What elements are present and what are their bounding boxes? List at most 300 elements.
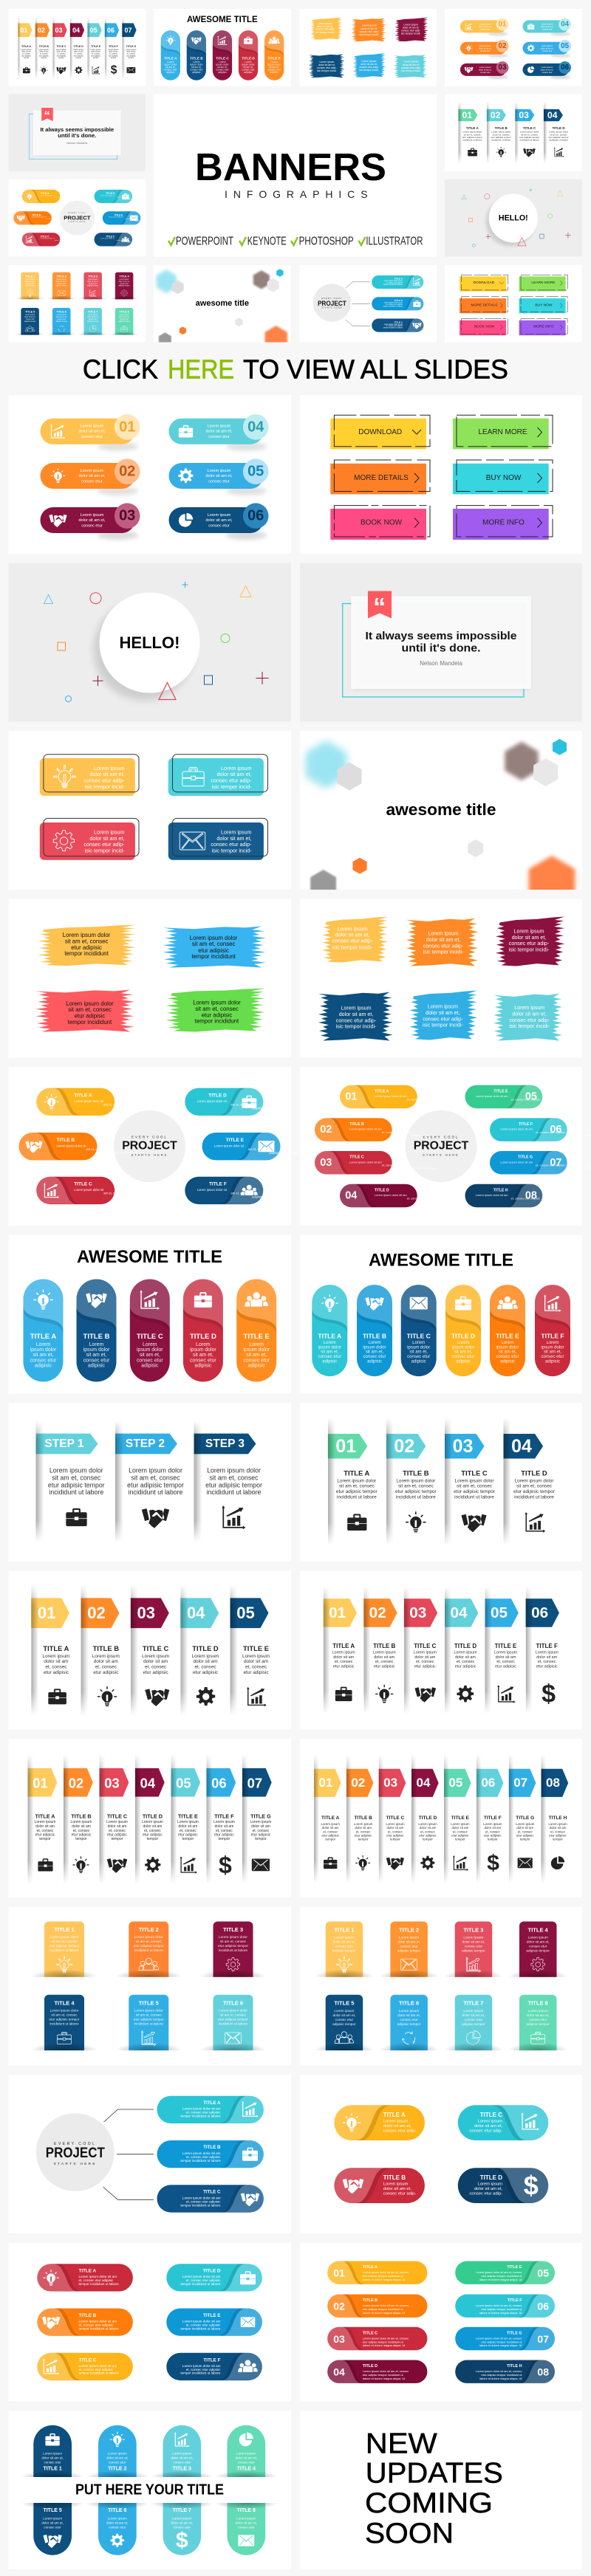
step 05: TITLE E (178, 1813, 198, 1819)
pill: title C: consec etur adip- (470, 2129, 502, 2133)
pill 07: Lorem ipsum dolor sit am et, consec (476, 2336, 522, 2340)
step 01: TITLE A (344, 1469, 370, 1477)
pill: title B: tempor incididunt ut labore (78, 2326, 119, 2330)
pill 03: dolor sit am et, (78, 518, 106, 523)
pill 05 (455, 2261, 555, 2284)
step 05: TITLE E (495, 1643, 517, 1649)
card: briefcase: consec etur adip- (211, 777, 252, 783)
step 05: 05 (176, 1775, 191, 1790)
step 02: 02 (369, 1604, 386, 1621)
pill: title C (458, 2105, 548, 2140)
panel: four step columns (300, 1403, 582, 1562)
pill 01 (340, 1085, 462, 1108)
blurred hexagons (305, 739, 575, 909)
pill 01: labore et dolore magna aliqua. Ut (363, 2277, 406, 2281)
pill 04: Lorem ipsum dolor sit am et, consec (363, 2369, 409, 2373)
capsule: title C (401, 1285, 437, 1376)
pill 07 (490, 1151, 591, 1174)
step 3: STEP 3 (205, 1438, 245, 1450)
pill: title C: TITLE C (480, 2112, 502, 2118)
pill 02: 02 (333, 2301, 345, 2312)
panel: numbered pills with icons (9, 395, 291, 554)
brush: blue (163, 926, 266, 967)
pill: title C: Lorem ipsum dolor sit am (78, 2363, 117, 2367)
brush: yellow: Lorem ipsum (337, 926, 368, 932)
pill: title B: Lorem ipsum (383, 2182, 408, 2187)
decorative shapes (44, 582, 269, 701)
button: more details (330, 460, 430, 494)
pill: title B: TITLE B (203, 2145, 221, 2150)
step 03 (404, 1586, 437, 1714)
step 06: $ (219, 1852, 232, 1878)
pill: title D: tempor incididunt ut labore (180, 2281, 221, 2285)
step 03: TITLE C (386, 1816, 404, 1821)
brush: blue: Lorem ipsum dolor (190, 935, 238, 941)
project circle: PROJECT (414, 1140, 468, 1152)
card: gear: dolor sit am et, (89, 834, 124, 842)
pill: title A (37, 2264, 133, 2292)
panel: project with three connected pills (9, 2075, 291, 2233)
step 03: TITLE C (143, 1644, 169, 1652)
pill: title A: TITLE A (78, 2269, 97, 2274)
brush: teal: consec etur adip- (509, 1017, 550, 1023)
pill 01: Lorem ipsum dolor sit am et, consec (363, 2270, 409, 2274)
card: title 5: TITLE 5 (139, 1999, 159, 2006)
card: envelope: Lorem ipsum (221, 828, 252, 835)
pill 07: TITLE G (518, 1155, 533, 1160)
brush: blue: isic tempor incidi- (423, 1022, 463, 1028)
thumbnail: project six pills (9, 179, 150, 256)
tab: title 1: consec etur (44, 2460, 61, 2464)
brush: orange: dolor sit am et, (426, 937, 460, 943)
card: title 4 (31, 1995, 98, 2050)
pill 05 (168, 458, 269, 495)
brush: yellow: sit am et, consec (65, 938, 108, 944)
pill 08: Lorem ipsum dolor sit am et, consec (476, 2369, 522, 2373)
pill 02: consec etur (81, 479, 103, 484)
step 06: 06 (531, 1604, 548, 1621)
step 1 (35, 1421, 105, 1542)
pill 08 (465, 1184, 570, 1207)
brush: maroon: Lorem ipsum (513, 928, 544, 934)
pill: title F: Lorem ipsum dolor sit am (182, 2363, 221, 2367)
pill 05: etur adipisc tempor incididunt ut (482, 2274, 522, 2278)
step 02: TITLE B (373, 1643, 396, 1649)
panel: four brush banners (9, 899, 291, 1057)
step 06 (206, 1754, 236, 1883)
software list with check marks: KEYNOTE (247, 235, 287, 248)
pill: title B: consec etur adip- (383, 2192, 416, 2197)
pill: title E: TITLE E (203, 2313, 220, 2318)
pill: title C (157, 2185, 264, 2213)
tab: title 3: Lorem ipsum (172, 2451, 192, 2455)
brush: maroon: dolor sit am et, (512, 935, 546, 941)
pill 02: dolor sit am et, (78, 474, 106, 478)
tab: title 1: Lorem ipsum (43, 2451, 62, 2455)
step 06: 06 (481, 1776, 495, 1790)
card: bulb (40, 755, 139, 796)
pill: title C: Lorem ipsum (477, 2120, 502, 2124)
step 07: TITLE G (250, 1813, 271, 1819)
pill: title A: consec etur adip- (383, 2129, 416, 2133)
step 03 (131, 1584, 169, 1716)
step 06: TITLE F (484, 1816, 502, 1821)
pill 05: dolor sit am et, (205, 474, 233, 478)
step 3 (194, 1421, 262, 1542)
pill 05: TITLE E (507, 2265, 522, 2270)
pill 02: 02 (320, 1124, 332, 1136)
brush: blue (409, 991, 477, 1040)
card: title 6: TITLE 6 (399, 2000, 419, 2007)
call to action: click here to view all slides (83, 354, 508, 384)
capsule: title D: TITLE D (190, 1333, 216, 1341)
step 01: 01 (38, 1604, 55, 1622)
step 03: TITLE C (414, 1643, 437, 1649)
step 06 (476, 1754, 504, 1883)
pill 02: 02 (119, 464, 135, 480)
pill 03 (40, 503, 140, 540)
pill 08: 08 (537, 2366, 549, 2377)
pill 03: 03 (333, 2333, 345, 2345)
capsule: title B: TITLE B (363, 1332, 386, 1339)
capsule: title B (357, 1285, 392, 1376)
project circle: STARTS HERE (54, 2162, 97, 2165)
brush: green: sit am et, consec (195, 1005, 239, 1011)
pill: title D: et, consec etur adipisic (186, 2278, 221, 2281)
pill: title C (37, 2353, 133, 2380)
step 04: 04 (417, 1776, 431, 1790)
quote text: until it's done. (402, 642, 480, 654)
panel: six brush banners (300, 899, 582, 1057)
card: title 7: TITLE 7 (463, 2000, 483, 2007)
tab: title 7: $ (176, 2528, 188, 2553)
project circle: STARTS HERE (423, 1153, 460, 1156)
thumbnail: quote slide (9, 95, 146, 171)
pill: title B (334, 2168, 425, 2203)
step 07: 07 (513, 1776, 527, 1790)
pill 06: 06 (537, 2301, 549, 2312)
panel: eight title cards (300, 1906, 582, 2066)
capsule: title E: TITLE E (496, 1332, 519, 1339)
step 06: 06 (211, 1775, 227, 1790)
card: envelope: consec etur adip- (211, 840, 252, 848)
tab: title 1: TITLE 1 (43, 2466, 62, 2472)
brush: green (165, 988, 264, 1032)
pill: title D: $ (524, 2171, 539, 2201)
button: buy now (453, 460, 553, 494)
heading: new updates coming soon: COMING (365, 2487, 493, 2519)
card: briefcase: dolor sit am et, (216, 771, 251, 777)
pill 05: Lorem ipsum (208, 469, 231, 473)
tab: title 7: dolor sit am et, (171, 2521, 193, 2524)
pill 02 (327, 2295, 427, 2318)
tab: title 5: consec etur (44, 2525, 61, 2529)
pill: title C: TITLE C (203, 2190, 221, 2195)
step 03: 03 (383, 1776, 397, 1790)
card: title 4 (508, 1921, 567, 1977)
pill 03: Lorem ipsum dolor sit am et, consec (363, 2336, 409, 2340)
pill: title C: dolor sit am et, (474, 2124, 502, 2129)
software list with check marks (168, 235, 423, 248)
pill 06: etur adipisc tempor incididunt ut (482, 2307, 522, 2311)
tab: title 5: Lorem ipsum (43, 2516, 62, 2520)
pill: title D: Lorem ipsum dolor sit am (182, 2275, 221, 2278)
step 01: 01 (329, 1604, 346, 1621)
step 04 (504, 1418, 556, 1545)
step 05: 05 (236, 1604, 255, 1622)
step 05 (230, 1584, 270, 1716)
pill 08: labore et dolore magna aliqua. Ut (479, 2376, 522, 2380)
capsule: title D: TITLE D (451, 1332, 475, 1339)
pill: title E (166, 2308, 262, 2336)
tab: title 7: TITLE 7 (173, 2508, 191, 2513)
brush: maroon (496, 917, 564, 966)
button: more details: MORE DETAILS (354, 474, 409, 482)
pill 08: TITLE H (493, 1188, 508, 1192)
step 05: 05 (448, 1776, 462, 1790)
pill 04: etur adipisc tempor incididunt ut (363, 2373, 404, 2377)
pill 02: etur adipisc tempor incididunt ut (363, 2307, 404, 2311)
pill 06 (168, 503, 269, 540)
panel: project with eight numbered pills (300, 1067, 591, 1226)
step 01 (314, 1754, 341, 1883)
step 04: TITLE D (521, 1469, 547, 1477)
tab: title 3 (151, 2425, 213, 2477)
brush: blue: Lorem ipsum (428, 1004, 458, 1010)
step 08: TITLE H (549, 1816, 567, 1821)
tab: title 8: Lorem ipsum (236, 2516, 256, 2520)
brush: yellow: Lorem ipsum dolor (63, 932, 111, 938)
card: title 2 (115, 1921, 182, 1977)
tab: title 7 (151, 2503, 213, 2555)
thumbnail: seven step columns (9, 9, 146, 86)
card: envelope: dolor sit am et, (216, 834, 251, 842)
heading: new updates coming soon (365, 2428, 503, 2549)
hello circle (93, 592, 199, 700)
pill: title D: TITLE D (480, 2174, 502, 2181)
heading: awesome title: AWESOME TITLE (77, 1247, 222, 1267)
button: download: DOWNLOAD (358, 428, 402, 436)
pill 01: dolor sit am et, (78, 430, 106, 434)
project circle: EVERY COOL (54, 2142, 96, 2146)
pill: title A: TITLE A (74, 1093, 92, 1098)
pill: title B: et, consec etur adipisic (78, 2323, 114, 2326)
pill 01: etur adipisc tempor incididunt ut (363, 2274, 404, 2278)
brush: blue: dolor sit am et, (426, 1010, 460, 1016)
step 2: STEP 2 (126, 1438, 165, 1450)
card: title 6 (199, 1995, 266, 2050)
step 01 (28, 1754, 57, 1883)
card: briefcase: isic tempor incid- (212, 783, 252, 790)
step 02: TITLE B (71, 1813, 92, 1819)
pill: title D: dolor sit am et, (474, 2187, 502, 2191)
tab: title 2: Lorem ipsum (108, 2451, 127, 2455)
pill: title D (166, 2264, 262, 2292)
pill 05: 05 (525, 1090, 537, 1102)
card: title 4: TITLE 4 (54, 1999, 75, 2006)
capsule: title A: TITLE A (30, 1333, 56, 1341)
capsule: title B: TITLE B (83, 1333, 110, 1341)
card: title 5: TITLE 5 (334, 2000, 354, 2007)
pill 02: TITLE B (363, 2298, 378, 2303)
panel: eight arch tabs with central title (9, 2411, 291, 2569)
brush: blue: tempor incididunt (191, 953, 236, 960)
step 05 (171, 1754, 200, 1883)
step 03: 03 (453, 1436, 473, 1457)
pill 01: 01 (345, 1090, 357, 1102)
panel: quote slide (300, 563, 582, 722)
step 02 (363, 1586, 397, 1714)
step 04: TITLE D (192, 1644, 219, 1652)
panel: five capsules with title (9, 1234, 291, 1394)
pill 07 (455, 2327, 555, 2350)
step 06: $ (487, 1851, 499, 1875)
thumbnail: dashed buttons (445, 265, 582, 342)
brush: green: tempor incididunt (195, 1017, 239, 1024)
pill: title A: et, consec etur adipisic (78, 2278, 114, 2281)
pill 04: TITLE D (363, 2364, 378, 2369)
heading: new updates coming soon: SOON (365, 2518, 454, 2549)
tab: title 8: dolor sit am et, (236, 2521, 257, 2524)
pill: title D (185, 1088, 282, 1116)
pill: title A (36, 1088, 160, 1116)
tab: title 2 (86, 2425, 149, 2477)
capsule: title A (24, 1279, 64, 1382)
brush: orange: consec etur adip- (423, 943, 464, 949)
tab: title 4: consec etur (238, 2460, 255, 2464)
pill: title B: et, consec etur adipisic (186, 2154, 221, 2159)
pill 03: consec etur (81, 523, 103, 528)
pill: title A (157, 2096, 264, 2123)
heading: put here your title: PUT HERE YOUR TITLE (75, 2482, 224, 2498)
pill: title D: Lorem ipsum (477, 2182, 502, 2187)
pill: title B (157, 2140, 264, 2168)
tab: title 3: TITLE 3 (173, 2466, 191, 2472)
card: title 6 (379, 1995, 439, 2050)
capsule: title D (445, 1285, 481, 1376)
pill 01 (327, 2261, 427, 2284)
tab: title 7: consec etur (174, 2525, 191, 2529)
pill 04: 04 (247, 419, 264, 435)
card: title 1 (31, 1921, 98, 1977)
pill 05 (465, 1085, 570, 1108)
card: title 3: TITLE 3 (223, 1926, 243, 1933)
pill 02: Lorem ipsum dolor sit am et, consec (363, 2304, 409, 2307)
card: title 3 (199, 1921, 266, 1977)
brush: maroon: isic tempor incidi- (509, 947, 550, 952)
brush: orange: Lorem ipsum (428, 930, 459, 936)
thumbnail: six brush banners (300, 9, 437, 86)
card: title 8 (508, 1995, 567, 2050)
quote card (351, 597, 531, 689)
brush: orange (406, 918, 478, 966)
button: book now: BOOK NOW (361, 518, 403, 527)
brush: yellow: isic tempor incidi- (332, 945, 373, 951)
step 01: TITLE A (43, 1644, 69, 1652)
quote author: Nelson Mandela (420, 660, 462, 667)
card: title 2: TITLE 2 (399, 1927, 419, 1934)
tab: title 6 (86, 2503, 149, 2555)
panel: four large pills (300, 2075, 582, 2233)
pill: title B: TITLE B (78, 2313, 97, 2318)
card: title 1: TITLE 1 (54, 1926, 75, 1933)
pill 04 (168, 414, 269, 451)
brush: red: sit am et, consec (68, 1006, 112, 1013)
brush: red (35, 989, 134, 1032)
heading: awesome title: AWESOME TITLE (369, 1251, 513, 1271)
heading: new updates coming soon: NEW (366, 2428, 437, 2460)
step 04: 04 (511, 1436, 532, 1457)
call to action: click here to view all slides: TO VIEW ALL SLIDES (243, 354, 508, 384)
pill: title A: Lorem ipsum dolor sit am (78, 2275, 117, 2278)
step 03 (445, 1418, 496, 1545)
quote text (365, 630, 517, 654)
step 02: TITLE B (354, 1816, 372, 1821)
step 04 (180, 1584, 219, 1716)
brush: red: Lorem ipsum dolor (66, 1000, 114, 1006)
pill: title C (36, 1177, 160, 1204)
quote text: It always seems impossible (365, 630, 517, 642)
project circle: EVERY COOL (423, 1136, 460, 1138)
step 07 (509, 1754, 536, 1883)
project circle: PROJECT (46, 2146, 105, 2161)
brush: yellow: tempor incididunt (64, 950, 109, 957)
pill 02: TITLE B (349, 1122, 364, 1127)
pill 05: 05 (537, 2267, 549, 2278)
bookmark with quotation mark: “ (373, 594, 386, 622)
pill 08: 08 (525, 1189, 537, 1201)
pill 04: 04 (345, 1189, 357, 1201)
step 04: 04 (450, 1604, 468, 1621)
pill: title D: TITLE D (208, 1093, 227, 1098)
heading: banners: BANNERS (195, 146, 386, 189)
pill 03 (315, 1151, 437, 1174)
pill: title C: tempor incididunt ut labore (180, 2203, 221, 2207)
card: envelope: isic tempor incid- (212, 847, 252, 853)
pill: title B: Lorem ipsum dolor sit am (78, 2319, 117, 2323)
pill 03: 03 (320, 1157, 332, 1169)
pill: title F: TITLE F (209, 1181, 227, 1186)
pill 03: 03 (119, 508, 135, 524)
pill: title B: dolor sit am et, (383, 2187, 411, 2191)
pill 04: consec etur (208, 435, 230, 439)
tab: title 6: dolor sit am et, (106, 2521, 129, 2524)
brush: yellow: dolor sit am et, (335, 932, 369, 938)
pill: title F: et, consec etur adipisic (186, 2367, 221, 2371)
panel: six title cards (9, 1906, 291, 2066)
pill: title D (458, 2168, 548, 2203)
step 02: 02 (87, 1604, 106, 1622)
capsule: title A (312, 1285, 347, 1376)
brush: green: Lorem ipsum dolor (193, 999, 241, 1006)
card: title 4: TITLE 4 (528, 1927, 549, 1934)
pill: title F: TITLE F (203, 2357, 221, 2363)
brush: yellow: consec etur adip- (332, 938, 373, 944)
pill: title A: Lorem ipsum (383, 2120, 408, 2124)
pill 06 (455, 2295, 555, 2318)
step 06: $ (542, 1680, 556, 1708)
step 02 (64, 1754, 93, 1883)
pill 07: 07 (550, 1157, 561, 1169)
thumbnail: hexagon awesome title (154, 265, 291, 351)
step 02: 02 (69, 1775, 83, 1790)
pill 01 (40, 414, 140, 451)
pill 03: TITLE C (363, 2332, 378, 2336)
panel: seven step columns (9, 1739, 291, 1897)
pill 05: 05 (247, 464, 264, 480)
pill: title C: TITLE C (78, 2357, 97, 2363)
card: gear: Lorem ipsum (94, 828, 125, 835)
